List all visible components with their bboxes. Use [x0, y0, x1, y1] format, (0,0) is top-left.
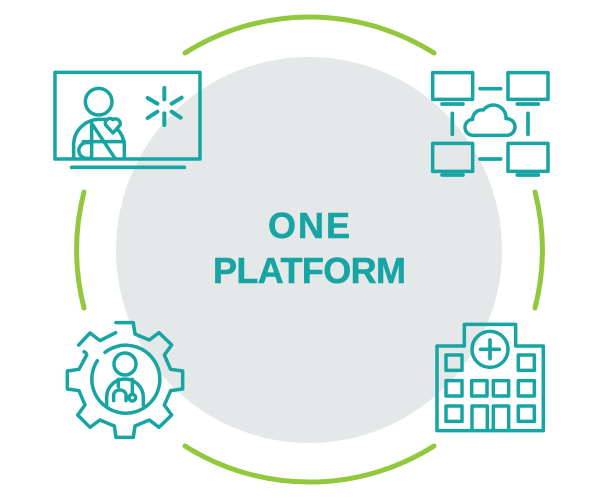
icon: gear with doctor	[67, 323, 183, 437]
central grey circle	[116, 57, 502, 443]
title: one platform: ONE	[268, 205, 350, 246]
icon: networked computers around a cloud	[433, 73, 548, 175]
icon: hospital building	[437, 324, 543, 431]
green ring segments	[77, 17, 542, 482]
title: one platform: PLATFORM	[213, 250, 406, 291]
icon: telehealth screen with patient	[55, 72, 200, 167]
title: one platform	[213, 205, 406, 291]
